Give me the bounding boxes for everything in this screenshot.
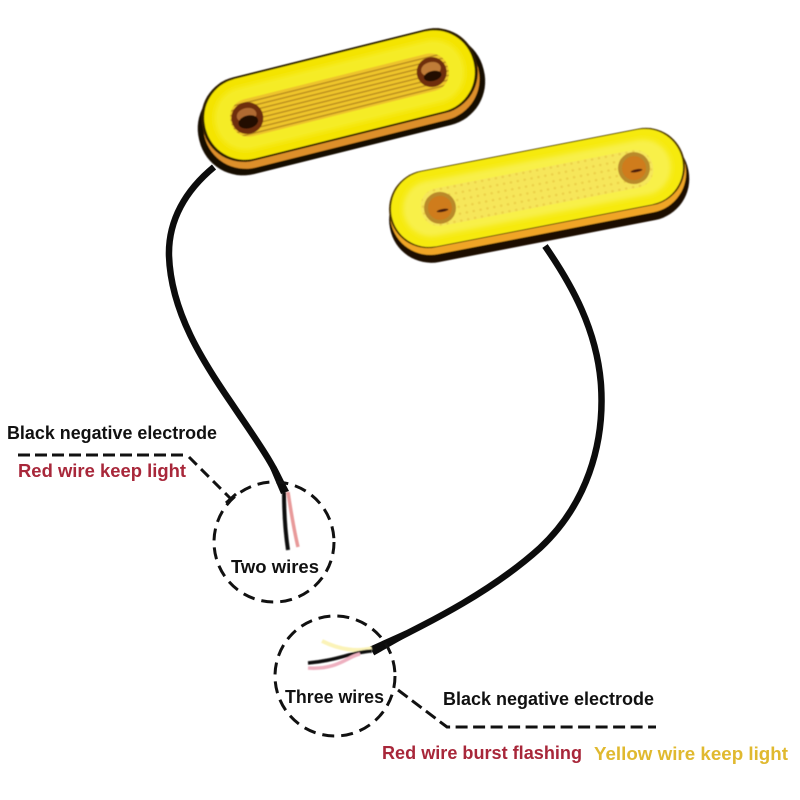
label: black negative electrode left: Black negative electrode xyxy=(7,422,217,443)
mounting hole right xyxy=(414,54,450,90)
lamp yellow face xyxy=(196,22,483,168)
wires: three stripped conductors xyxy=(308,641,372,668)
wire: left light cable xyxy=(169,167,289,494)
lamp yellow face xyxy=(384,122,690,254)
label: yellow wire keep light: Yellow wire keep light xyxy=(594,743,788,764)
reflector strip xyxy=(418,147,656,229)
lamp face glow xyxy=(398,135,676,241)
callout circle: two wires xyxy=(214,482,334,602)
label: three wires: Three wires xyxy=(285,686,384,707)
label: red wire keep light: Red wire keep light xyxy=(18,460,186,481)
lamp orange rim xyxy=(383,126,693,262)
leader line: three wires xyxy=(398,690,656,727)
reflector strip xyxy=(226,50,453,141)
label: black negative electrode right: Black negative electrode xyxy=(443,688,654,709)
lamp base shadow xyxy=(188,25,495,185)
wires: two stripped conductors xyxy=(284,492,298,550)
mounting hole left xyxy=(228,99,267,137)
mounting hole left xyxy=(421,189,459,227)
lamp face glow xyxy=(208,33,471,157)
wire: right light cable xyxy=(370,246,602,655)
light: left marker lamp xyxy=(186,18,495,185)
lamp dark outline xyxy=(382,121,692,255)
leader line: two wires xyxy=(18,455,236,503)
label: two wires: Two wires xyxy=(231,556,319,577)
callout circle: three wires xyxy=(275,616,395,736)
lamp dark outline xyxy=(192,19,487,171)
lamp base shadow xyxy=(382,129,697,270)
lamp orange rim xyxy=(194,26,488,178)
mounting hole right xyxy=(615,149,653,187)
light: right marker lamp xyxy=(380,121,697,270)
label: red wire burst flashing: Red wire burst flashing xyxy=(382,742,582,763)
